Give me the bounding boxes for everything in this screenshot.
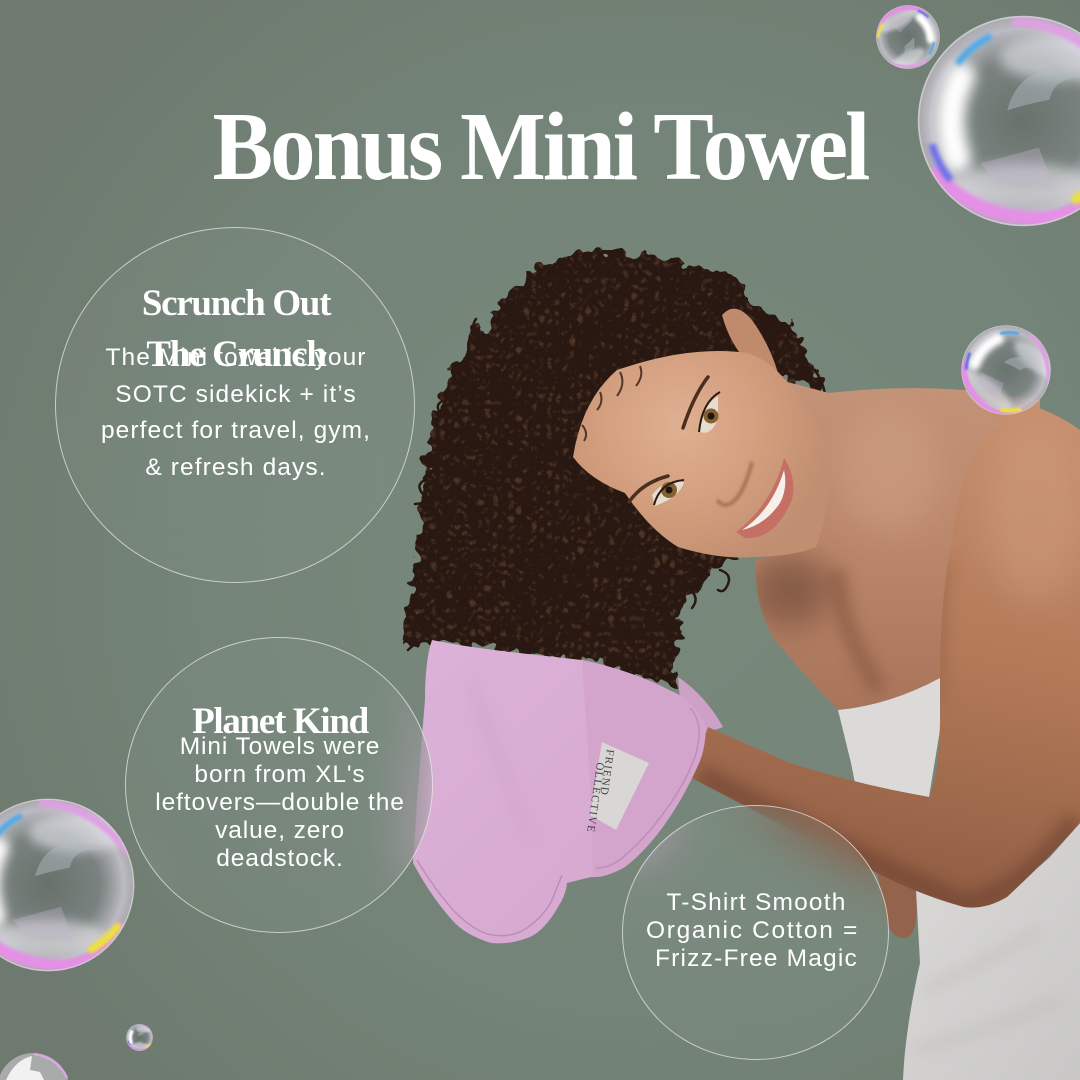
- heading: scrunch out the crunch: The Crunch: [146, 334, 326, 375]
- photo: woman drying her curly hair with the mini towel: [406, 247, 1080, 1080]
- towel label: FRIEND: [597, 749, 616, 797]
- heading: scrunch out the crunch: [142, 283, 332, 375]
- face: [573, 351, 829, 558]
- eyes and brows: [629, 377, 720, 506]
- bubble: large left: [0, 799, 134, 971]
- nose: [717, 462, 752, 505]
- panel: planet kind: [125, 637, 433, 933]
- lower white towel: [903, 823, 1080, 1080]
- text: mini towel description: perfect for travel, gym,: [101, 417, 371, 444]
- towel fold layer: [582, 660, 706, 877]
- title: Bonus Mini Towel: [213, 93, 867, 200]
- text: mini towel description: SOTC sidekick + it’s: [115, 380, 357, 408]
- text: planet kind description: [155, 733, 405, 872]
- text: mini towel description: The Mini towel is your: [105, 344, 367, 371]
- towel label: OLLECTIVE: [584, 762, 606, 834]
- bubble: tiny bottom: [126, 1024, 153, 1051]
- heading: planet kind: Planet Kind: [192, 701, 368, 742]
- towel hem: [417, 708, 699, 936]
- panel: organic cotton: [622, 805, 889, 1060]
- upper white towel: [838, 678, 940, 797]
- bubble: small top: [865, 0, 951, 80]
- text: planet kind description: value, zero: [215, 817, 345, 844]
- heading: scrunch out the crunch: Scrunch Out: [142, 283, 330, 324]
- text: organic cotton claim: Frizz-Free Magic: [655, 945, 858, 972]
- text: organic cotton claim: T-Shirt Smooth: [666, 889, 847, 916]
- towel soft crease: [470, 680, 530, 840]
- arm: [690, 390, 1080, 908]
- text: planet kind description: leftovers—double the: [155, 789, 405, 816]
- pink mini towel: [413, 640, 706, 943]
- text: planet kind description: deadstock.: [216, 845, 344, 872]
- text: mini towel description: & refresh days.: [145, 454, 327, 480]
- text: organic cotton claim: [646, 889, 859, 972]
- forehead hair wisps: [582, 366, 641, 441]
- text: planet kind description: Mini Towels were: [180, 733, 380, 760]
- bubble: right middle: [943, 307, 1069, 433]
- torso under elbow: [877, 873, 917, 938]
- text: organic cotton claim: Organic Cotton =: [646, 917, 859, 944]
- towel folds: [915, 930, 1060, 1050]
- bubble: large top right: [918, 16, 1080, 226]
- panel: scrunch out the crunch: [55, 227, 415, 583]
- smile: [736, 458, 793, 538]
- towel label: [584, 742, 649, 834]
- neck and chest: [748, 380, 1040, 710]
- rear towel flap: [678, 677, 723, 735]
- text: mini towel description: [101, 344, 371, 480]
- bubble: bottom left: [0, 1053, 68, 1080]
- ear: [722, 309, 778, 373]
- hair: [406, 247, 825, 687]
- text: planet kind description: born from XL's: [194, 761, 366, 788]
- loose curls: [408, 319, 825, 650]
